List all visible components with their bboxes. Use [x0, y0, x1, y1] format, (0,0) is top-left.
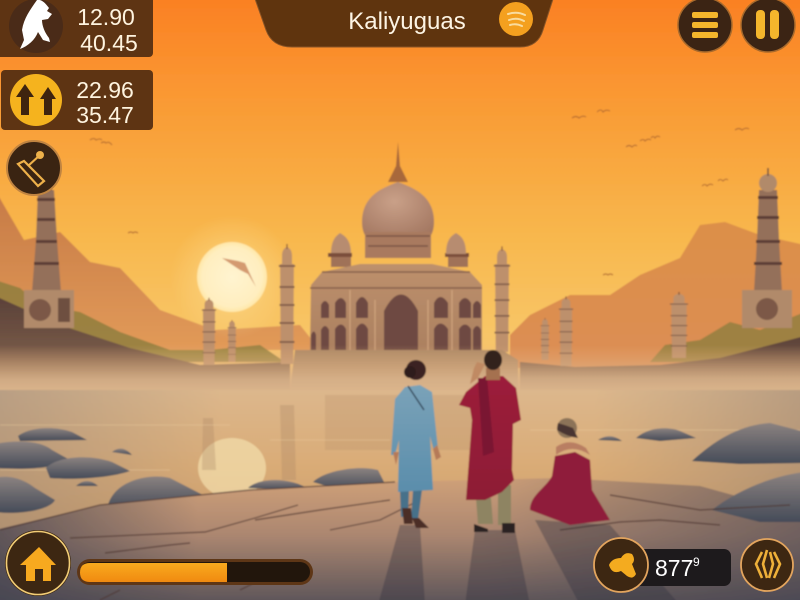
right mountains: [510, 222, 800, 368]
bird silhouette in front of sun: [222, 258, 256, 287]
icon: orange sound badge: [499, 2, 533, 36]
icon: house: [20, 547, 56, 581]
top left stats panel one: [0, 0, 153, 57]
lake: [0, 390, 800, 545]
top left stats panel two: [1, 70, 153, 130]
sky background: [0, 0, 800, 392]
Taj Mahal: [310, 142, 482, 350]
distant minarets: [202, 292, 688, 366]
home button: [5, 530, 71, 596]
main minarets: [279, 244, 510, 364]
title banner: [254, 0, 554, 47]
sun glow: [170, 215, 294, 339]
top left stats panel two: 22.96: [76, 77, 134, 103]
stone ground: [0, 478, 800, 600]
right stone wall: [520, 336, 800, 392]
tool button: [7, 141, 61, 195]
title: Kaliyuguas: [348, 8, 466, 35]
rocks: [0, 423, 800, 513]
left vegetation: [0, 280, 285, 362]
progress bar: [77, 559, 313, 585]
top left stats panel two: 35.47: [76, 102, 134, 128]
seated woman in red dress: [530, 418, 610, 525]
reflections on the lake: [0, 395, 800, 498]
top left stats panel one: 40.45: [80, 30, 138, 56]
icon: golden emblem: [756, 550, 780, 578]
score counter: 9: [693, 555, 700, 569]
flock of birds: [90, 110, 749, 275]
icon: white vulture: [20, 0, 52, 49]
woman in blue: [391, 360, 441, 528]
horizon fog: [0, 345, 800, 393]
ground cracks: [0, 482, 790, 600]
icon: two up arrows: [16, 84, 56, 115]
menu button: [678, 0, 732, 52]
emblem button: [741, 539, 793, 591]
man in crimson robe: [459, 350, 521, 533]
taj arches: [311, 294, 481, 350]
sun: [197, 242, 267, 312]
person shadows: [378, 520, 680, 600]
top left stats panel one: 12.90: [77, 4, 135, 30]
left stone wall: [0, 296, 290, 392]
right tower: [742, 168, 792, 328]
icon: tool: [18, 155, 44, 186]
pause button: [741, 0, 795, 52]
left tower: [24, 183, 74, 328]
front right rock: [712, 472, 800, 522]
left mountains: [0, 190, 320, 350]
right vegetation: [650, 312, 800, 362]
score counter: 877: [655, 555, 693, 581]
score counter: [594, 538, 731, 592]
Taj plinth: [290, 350, 518, 392]
icon: trefoil: [609, 553, 636, 578]
